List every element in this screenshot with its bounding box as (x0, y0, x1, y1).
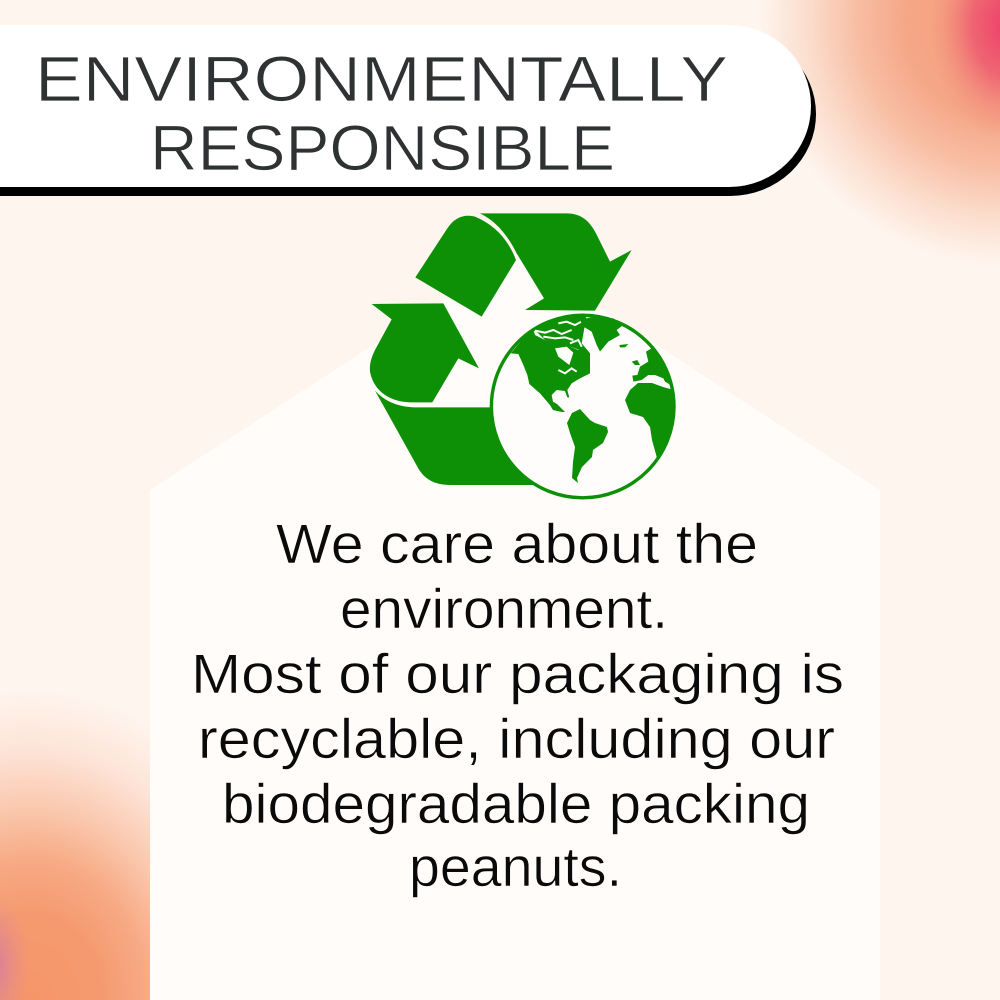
globe ocean and ring (491, 315, 674, 498)
recycling arrows (370, 213, 632, 485)
banner shadow (0, 32, 816, 196)
banner pill (0, 25, 811, 187)
title text: RESPONSIBLE (150, 112, 615, 184)
gradient blob: top right (700, 0, 1000, 300)
South and Central America (547, 400, 608, 483)
Africa (625, 383, 675, 458)
title text: ENVIRONMENTALLY (35, 43, 728, 115)
title text (35, 43, 728, 184)
body text: recyclable, including our (198, 707, 835, 770)
globe (491, 315, 675, 498)
body text: environment. (340, 577, 668, 640)
panel: house-shaped text background (150, 253, 880, 1000)
gradient blob: bottom left (0, 680, 152, 1000)
body text: peanuts. (409, 835, 622, 898)
body text: Most of our packaging is (191, 642, 844, 705)
North America (511, 315, 590, 412)
body text (191, 512, 844, 898)
title banner (0, 25, 816, 196)
body text: We care about the (276, 512, 758, 575)
icon: recycling arrows with globe (370, 213, 675, 498)
Greenland, Iceland, Europe and north Africa (580, 317, 671, 385)
body text: biodegradable packing (222, 772, 810, 835)
